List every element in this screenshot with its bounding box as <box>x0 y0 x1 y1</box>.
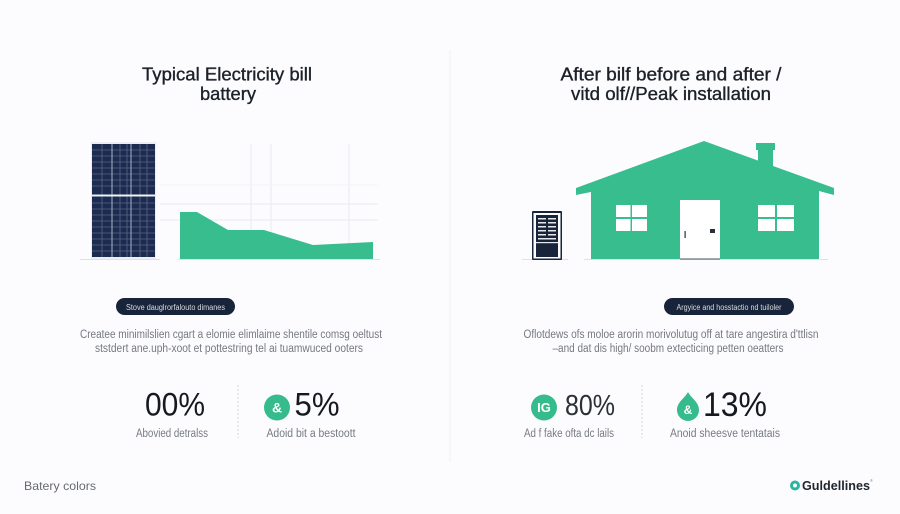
icon: green leaf badge: IG <box>537 400 551 415</box>
stat: 5%: 5% <box>294 386 340 422</box>
stat: 80% <box>524 390 615 440</box>
window: right <box>758 205 794 231</box>
icon: green badge: & <box>272 400 282 416</box>
stat: 13% <box>670 386 780 440</box>
stat: 5%: Adoid bit a bestoott <box>266 428 356 440</box>
text block: left body <box>80 329 383 355</box>
stat: 00% <box>136 386 208 440</box>
footer note: Batery colors <box>24 479 96 493</box>
icon: house <box>576 141 834 260</box>
area chart: bill <box>180 212 373 259</box>
icon: home battery <box>532 211 562 260</box>
text block: left body: Createe minimilslien cgart a elomie elimlaime shentile comsg oeltust <box>80 329 383 341</box>
logo: Guidelines: Guldellines <box>802 479 870 493</box>
heading: left title: battery <box>200 84 256 104</box>
heading: right title <box>560 64 782 104</box>
text block: right body: –and dat dis high/ soobm extecticing petten oeatters <box>552 343 784 355</box>
window: left <box>616 205 647 231</box>
pill label: right: Argyice and hosstactio nd tuiloler <box>676 303 782 312</box>
panel: left before <box>80 64 383 440</box>
heading: right title: vitd olf//Peak installation <box>571 84 771 104</box>
stat: 80%: Ad f fake ofta dc lails <box>524 428 614 440</box>
text block: left body: ststdert ane.uph-xoot et pottestring tel ai tuamwuced ooters <box>95 343 363 355</box>
stat: 13%: Anoid sheesve tentatais <box>670 428 780 440</box>
pill label: left <box>116 298 235 315</box>
stat: 13%: 13% <box>703 386 767 424</box>
icon: solar panel <box>91 142 156 259</box>
stat: 00%: 00% <box>145 386 205 422</box>
pill label: right <box>664 298 794 315</box>
heading: left title <box>142 64 312 104</box>
icon: green drop badge: & <box>684 403 693 417</box>
stat: 5% <box>264 386 356 440</box>
logo: Guidelines: ® <box>870 478 873 483</box>
heading: right title: After bilf before and after / <box>560 64 782 84</box>
panel: right after <box>522 64 834 440</box>
text block: right body: Oflotdews ofs moloe arorin morivolutug off at tare angestira d'ttlisn <box>524 329 818 341</box>
stat: 00%: Abovied detralss <box>136 428 208 440</box>
stat: 80%: 80% <box>565 390 615 422</box>
heading: left title: Typical Electricity bill <box>142 64 312 84</box>
text block: right body <box>524 329 818 355</box>
pill label: left: Stove dauglrorfalouto dimanes <box>126 303 225 312</box>
door <box>680 200 720 260</box>
